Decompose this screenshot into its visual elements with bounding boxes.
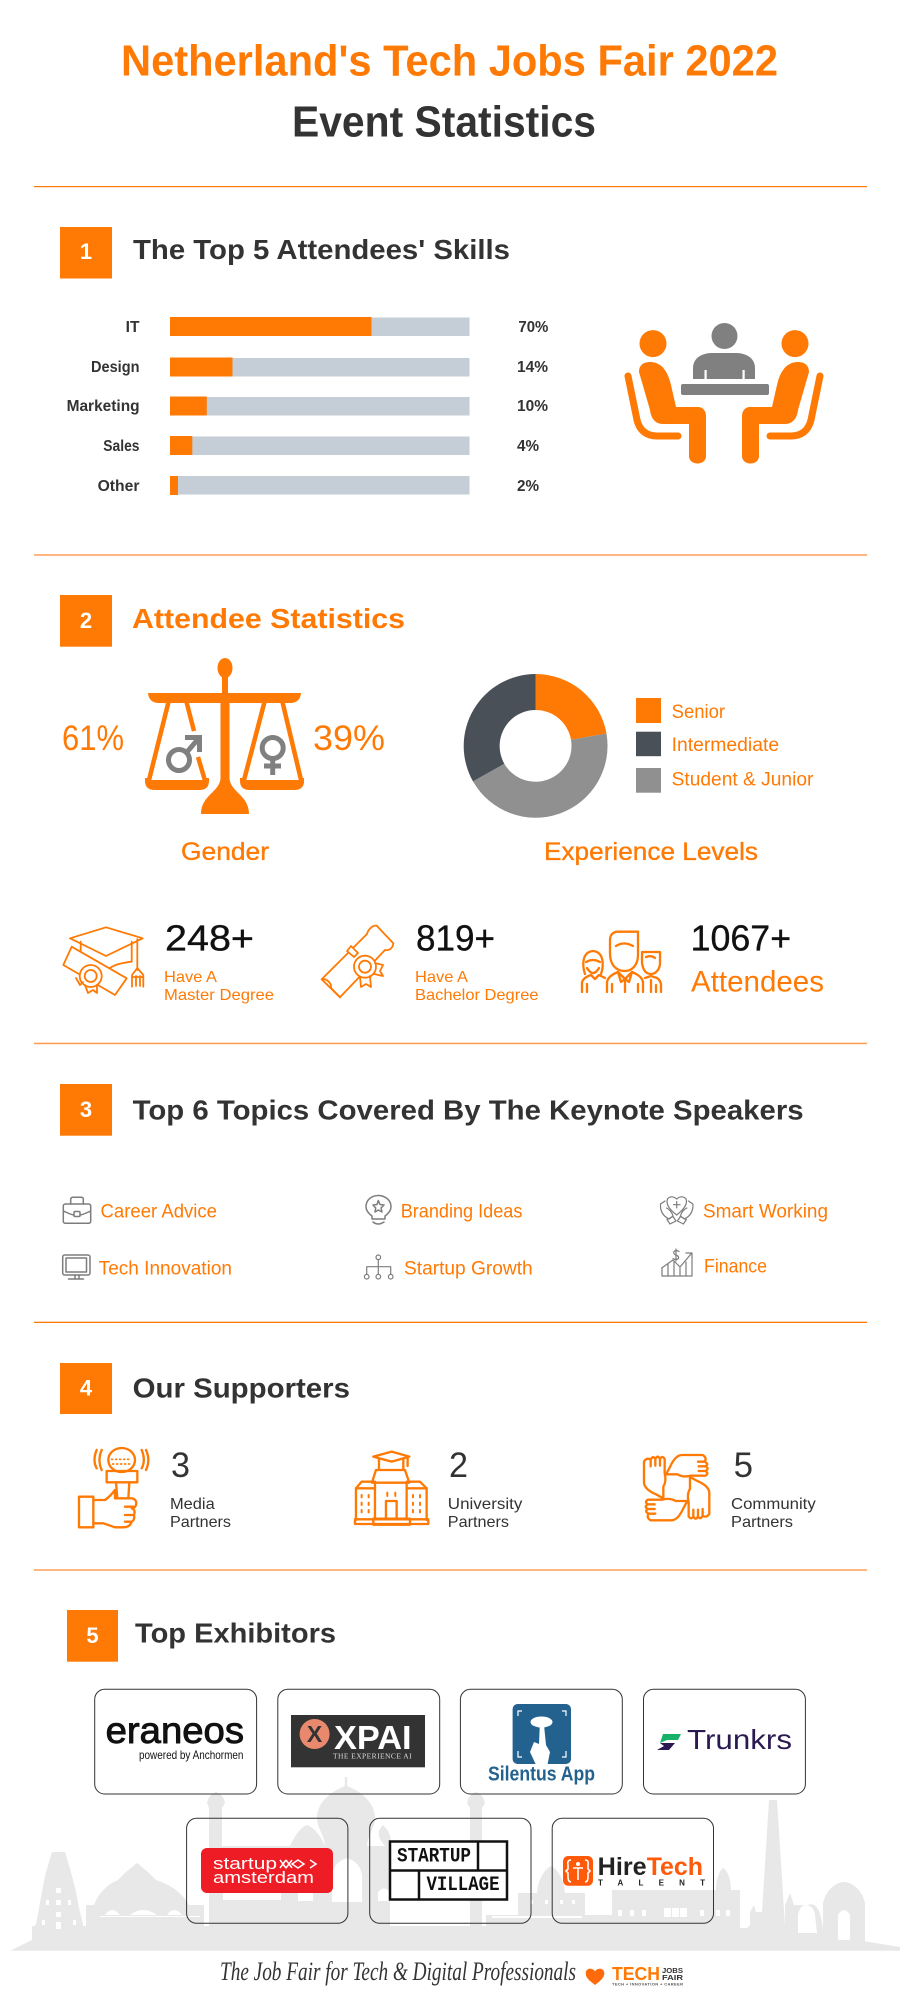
experience levels label: Experience Levels bbox=[544, 838, 758, 866]
icon: graduation cap and diploma bbox=[63, 927, 143, 995]
stat: media partners: 3 bbox=[171, 1446, 190, 1485]
bar chart: 70% bbox=[518, 319, 549, 336]
icon: heart bbox=[586, 1969, 604, 1985]
logo card: HireTech Talent: Hire bbox=[598, 1853, 647, 1881]
stat: community partners: Partners bbox=[731, 1514, 793, 1531]
section badge 1: 1 bbox=[80, 239, 92, 264]
section badge 4: 4 bbox=[80, 1376, 93, 1401]
logo card: startup amsterdam bbox=[187, 1818, 348, 1923]
footer logo: Tech Jobs Fair bbox=[612, 1964, 684, 1986]
icon: university bbox=[355, 1452, 428, 1525]
stat: media partners: Partners bbox=[170, 1514, 231, 1531]
stat: bachelor degree: Have A bbox=[415, 969, 468, 986]
bar chart: 10% bbox=[517, 398, 548, 415]
icon: diploma bbox=[322, 926, 393, 997]
panel: keynote topics bbox=[60, 1084, 828, 1279]
section badge 1 bbox=[60, 227, 112, 278]
legend bbox=[636, 698, 814, 793]
legend: Student & Junior bbox=[672, 770, 814, 791]
stat: media partners bbox=[170, 1446, 231, 1531]
topic: startup growth bbox=[364, 1255, 533, 1279]
bar chart: 2% bbox=[517, 478, 539, 495]
topic: startup growth: Startup Growth bbox=[404, 1258, 533, 1279]
icon: media microphone bbox=[79, 1448, 148, 1527]
logo card: startup amsterdam: amsterdam bbox=[213, 1868, 314, 1887]
panel: attendee statistics bbox=[60, 595, 824, 1004]
panel: top 5 attendees' skills bbox=[60, 227, 820, 495]
logo card: HireTech Talent: Tech bbox=[647, 1853, 703, 1881]
stat: master degree: 248+ bbox=[165, 918, 254, 959]
male symbol bbox=[168, 738, 200, 770]
heading: The Top 5 Attendees' Skills bbox=[133, 234, 510, 265]
stat: university partners: Partners bbox=[448, 1514, 509, 1531]
footer tagline: The Job Fair for Tech & Digital Professionals bbox=[220, 1957, 576, 1986]
stat: university partners: University bbox=[448, 1496, 522, 1513]
bar chart: Design bbox=[91, 359, 140, 376]
bar chart bbox=[67, 317, 549, 495]
stat: community partners: 5 bbox=[734, 1446, 753, 1485]
section badge 4 bbox=[60, 1363, 112, 1414]
section badge 5 bbox=[67, 1610, 118, 1662]
legend: Intermediate bbox=[672, 735, 779, 756]
logo card: Trunkrs bbox=[644, 1689, 805, 1794]
stat: university partners bbox=[448, 1446, 522, 1531]
stat: bachelor degree: Bachelor Degree bbox=[415, 987, 539, 1004]
footer logo: Tech Jobs Fair: TECH bbox=[612, 1964, 660, 1984]
legend: Senior bbox=[672, 702, 726, 723]
section badge 2 bbox=[60, 595, 112, 647]
gender percentage female: 39% bbox=[313, 719, 385, 758]
stat: community partners: Community bbox=[731, 1496, 816, 1513]
topic: finance bbox=[662, 1249, 767, 1278]
bar chart: 4% bbox=[517, 438, 539, 455]
panel: supporters bbox=[60, 1363, 816, 1531]
bar chart: Other bbox=[98, 478, 140, 495]
heading: Attendee Statistics bbox=[132, 603, 405, 634]
stat: bachelor degree: 819+ bbox=[416, 918, 495, 959]
icon: attendees bbox=[582, 932, 661, 992]
logo card: startup village bbox=[370, 1818, 531, 1923]
stat: master degree: Master Degree bbox=[164, 987, 274, 1004]
logo card: eraneos: powered by Anchormen bbox=[139, 1748, 243, 1762]
stat: community partners bbox=[731, 1446, 816, 1531]
bar chart: 14% bbox=[517, 359, 548, 376]
bar chart: Sales bbox=[103, 438, 140, 455]
logo card: Trunkrs: Trunkrs bbox=[687, 1724, 792, 1755]
icon: gender scale bbox=[145, 658, 304, 814]
bar chart: IT bbox=[126, 319, 140, 336]
logo card: HireTech Talent: TALENT bbox=[598, 1879, 705, 1888]
footer logo: Tech Jobs Fair: JOBS bbox=[662, 1968, 683, 1975]
logo card: Silentus App: Silentus App bbox=[488, 1764, 595, 1786]
gender label: Gender bbox=[181, 838, 269, 866]
stat: master degree: Have A bbox=[164, 969, 217, 986]
topic: tech innovation: Tech Innovation bbox=[99, 1258, 232, 1279]
heading: Top 6 Topics Covered By The Keynote Speakers bbox=[133, 1094, 804, 1125]
stat: bachelor degree bbox=[415, 918, 539, 1004]
logo card: startup amsterdam: startup bbox=[213, 1854, 277, 1873]
topic: tech innovation bbox=[63, 1255, 232, 1279]
donut chart: experience levels bbox=[464, 674, 608, 818]
icon: meeting bbox=[628, 323, 820, 464]
title: Event Statistics bbox=[292, 97, 596, 146]
logo card: XPAI bbox=[278, 1689, 440, 1794]
section badge 3: 3 bbox=[80, 1097, 92, 1122]
logo card: startup village: VILLAGE bbox=[426, 1874, 500, 1897]
title bbox=[121, 37, 778, 146]
logo card: HireTech Talent bbox=[552, 1818, 714, 1923]
stat: attendees bbox=[691, 918, 824, 999]
logo card: startup village: STARTUP bbox=[397, 1846, 471, 1869]
stat: master degree bbox=[164, 918, 274, 1004]
icon: community hands bbox=[644, 1455, 709, 1520]
topic: career advice: Career Advice bbox=[100, 1202, 217, 1222]
logo card: XPAI: XPAI bbox=[334, 1719, 412, 1756]
logo card: XPAI: X bbox=[307, 1721, 323, 1747]
section badge 3 bbox=[60, 1084, 112, 1136]
topic: smart working bbox=[660, 1197, 828, 1224]
stat: university partners: 2 bbox=[449, 1446, 468, 1485]
footer logo: Tech Jobs Fair: TECH + INNOVATION + CAREER bbox=[612, 1982, 683, 1986]
stat: attendees: 1067+ bbox=[691, 918, 791, 959]
bar chart: Marketing bbox=[67, 398, 140, 415]
female symbol bbox=[262, 738, 283, 775]
section badge 5: 5 bbox=[86, 1623, 99, 1648]
section badge 2: 2 bbox=[80, 608, 92, 633]
heading: Top Exhibitors bbox=[135, 1618, 336, 1649]
heading: Our Supporters bbox=[133, 1373, 350, 1404]
topic: branding ideas: Branding Ideas bbox=[401, 1202, 522, 1222]
stat: media partners: Media bbox=[170, 1496, 215, 1513]
logo card: Silentus App bbox=[460, 1689, 622, 1794]
gender percentage male: 61% bbox=[62, 719, 124, 758]
topic: finance: Finance bbox=[704, 1257, 767, 1278]
logo card: XPAI: THE EXPERIENCE AI bbox=[333, 1751, 412, 1760]
panel: top exhibitors bbox=[67, 1610, 805, 1923]
stat: attendees: Attendees bbox=[691, 966, 824, 999]
logo card: eraneos bbox=[95, 1689, 257, 1794]
topic: career advice bbox=[63, 1197, 217, 1223]
skyline silhouette bbox=[10, 1777, 900, 1951]
footer logo: Tech Jobs Fair: FAIR bbox=[662, 1973, 684, 1982]
topic: smart working: Smart Working bbox=[703, 1202, 828, 1222]
title: Netherland's Tech Jobs Fair 2022 bbox=[121, 37, 778, 86]
logo card: eraneos: eraneos bbox=[106, 1710, 244, 1751]
topic: branding ideas bbox=[366, 1196, 522, 1224]
